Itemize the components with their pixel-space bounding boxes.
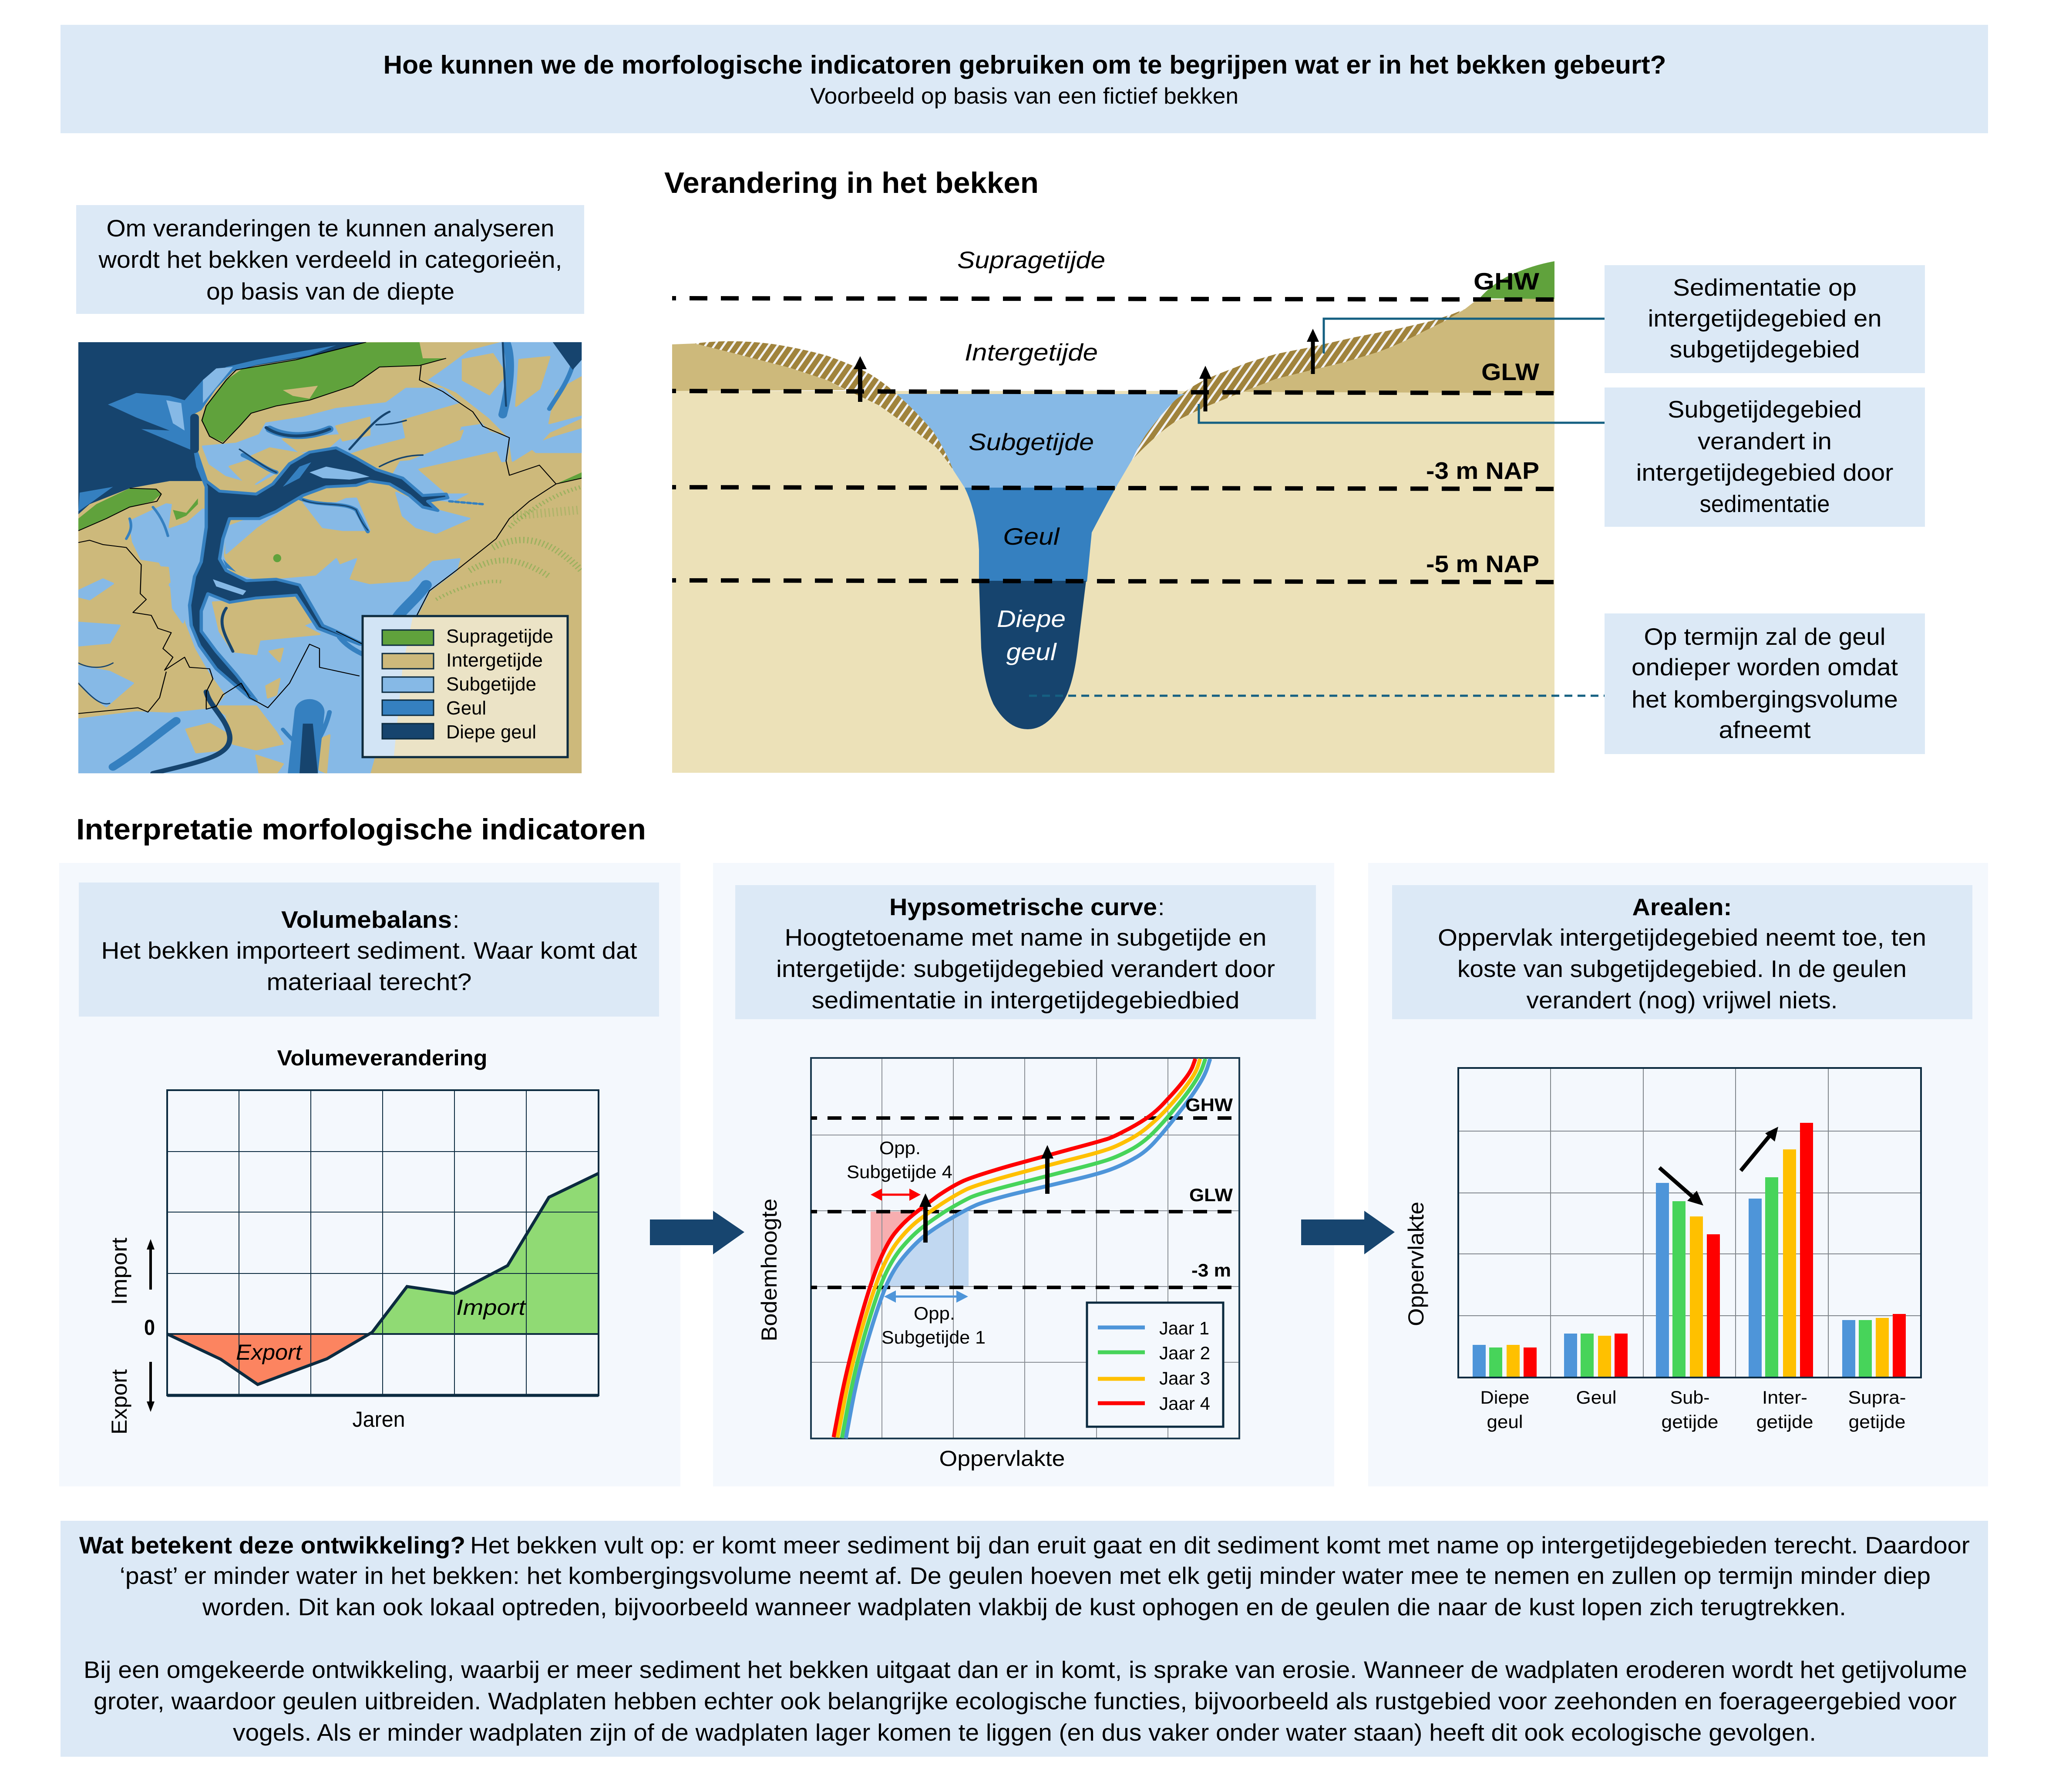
deep channels bbox=[190, 446, 448, 701]
blue double arrow bbox=[884, 1290, 968, 1303]
subtitle: Voorbeeld op basis van een fictief bekken bbox=[810, 84, 1238, 109]
arrow: panel 1 to 2 bbox=[650, 1211, 744, 1254]
panel header text: Oppervlak intergetijdegebied neemt toe, ten bbox=[1438, 924, 1926, 951]
callout: sedimentation bbox=[1605, 265, 1925, 373]
chart: hypsometric curves: Subgetijde 4 bbox=[847, 1162, 952, 1182]
arrow: panel 2 to 3 bbox=[1301, 1211, 1395, 1254]
legend: Jaar 4 bbox=[1159, 1393, 1210, 1414]
legend: Jaar 3 bbox=[1159, 1368, 1210, 1388]
callout: subtidal change bbox=[1605, 387, 1925, 527]
bars: subgetijde bbox=[1656, 1183, 1720, 1378]
tan right bank bbox=[1243, 298, 1554, 393]
cross-section diagram: Geul bbox=[1003, 523, 1060, 550]
chart: hypsometric curves: GLW bbox=[1189, 1185, 1233, 1205]
blue shaded area bbox=[885, 1212, 969, 1287]
cross-section diagram: GLW bbox=[1481, 358, 1539, 385]
chart: volume change: Export bbox=[236, 1340, 303, 1364]
callout: subtidal change: intergetijdegebied door bbox=[1636, 459, 1894, 486]
intro text box bbox=[76, 205, 584, 314]
tan islands inside subtidal areas bbox=[148, 354, 582, 773]
chart: hypsometric curves bbox=[757, 1058, 1239, 1471]
dashed levels bbox=[811, 1118, 1239, 1287]
map legend: Subgetijde bbox=[446, 674, 536, 695]
chart: volume change: Volumeverandering bbox=[277, 1046, 488, 1070]
callout: sedimentation: intergetijdegebied en bbox=[1648, 305, 1881, 332]
chart: volume change: 0 bbox=[144, 1315, 155, 1340]
cross-section diagram: geul bbox=[1006, 638, 1057, 665]
conclusion text box: groter, waardoor geulen uitbreiden. Wadplaten hebben echter ook belangrijke ecologische functies, bijvoorbeeld als rustgebied voor zeehonden en foerageergebied voor bbox=[94, 1688, 1957, 1715]
chart: hypsometric curves: Oppervlakte bbox=[939, 1446, 1065, 1471]
main title: Hoe kunnen we de morfologische indicatoren gebruiken om te begrijpen wat er in het bekken gebeurt? bbox=[383, 51, 1666, 79]
callout: channel becomes shallower: het kombergingsvolume bbox=[1632, 686, 1898, 713]
intro text box: wordt het bekken verdeeld in categorieën, bbox=[98, 246, 562, 273]
callout leader lines bbox=[1029, 319, 1605, 696]
map legend: Diepe geul bbox=[446, 721, 536, 743]
callout: subtidal change: Subgetijdegebied bbox=[1668, 396, 1862, 423]
chart: volume change: Jaren bbox=[353, 1407, 405, 1432]
green barrier islands bbox=[78, 342, 582, 562]
red double arrow bbox=[871, 1189, 921, 1201]
channel bbox=[965, 488, 1116, 582]
chart: areas per category: geul bbox=[1487, 1411, 1523, 1432]
subtidal water bbox=[897, 394, 1185, 488]
map of the basin bbox=[78, 342, 582, 773]
chart: areas per category: getijde bbox=[1848, 1411, 1906, 1432]
panel: volume balance bbox=[59, 863, 680, 1486]
surface labels: Opp. bbox=[879, 1138, 921, 1158]
cross-section diagram: Subgetijde bbox=[969, 428, 1094, 455]
chart: volume change: Export bbox=[107, 1369, 131, 1435]
mid-blue channel edges bbox=[113, 342, 573, 773]
chart: volume change: Import bbox=[456, 1295, 526, 1320]
panel header text: verandert (nog) vrijwel niets. bbox=[1526, 987, 1838, 1014]
panel header text: materiaal terecht? bbox=[266, 968, 472, 995]
callout: subtidal change: sedimentatie bbox=[1699, 490, 1830, 517]
trend arrows bbox=[1659, 1127, 1778, 1206]
category labels: Diepe bbox=[1480, 1387, 1530, 1408]
coast and border lines bbox=[78, 342, 582, 714]
light blue subtidal areas bbox=[78, 343, 582, 773]
legend bbox=[1087, 1303, 1223, 1427]
cross-section diagram: Diepe bbox=[997, 605, 1066, 632]
channel islands bbox=[213, 462, 370, 595]
chart: areas per category: Sub- bbox=[1670, 1387, 1710, 1408]
chart: areas per category: Inter- bbox=[1762, 1387, 1807, 1408]
legend: Jaar 2 bbox=[1159, 1343, 1210, 1363]
bars: intergetijde bbox=[1749, 1123, 1813, 1378]
level labels: GHW bbox=[1474, 268, 1539, 295]
cross-section diagram bbox=[672, 246, 1605, 773]
chart: areas per category: getijde bbox=[1756, 1411, 1813, 1432]
map legend: Geul bbox=[446, 697, 486, 719]
panel header text: intergetijde: subgetijdegebied verandert door bbox=[776, 955, 1275, 982]
panel header text: Hoogtetoename met name in subgetijde en bbox=[784, 924, 1267, 951]
conclusion text box: ‘past’ er minder water in het bekken: het kombergingsvolume neemt af. De geulen hoeven met elk getij minder water mee te nemen en zullen op termijn minder diep bbox=[120, 1562, 1931, 1589]
panel header text: koste van subgetijdegebied. In de geulen bbox=[1457, 955, 1907, 982]
thin deep branches bbox=[78, 343, 506, 773]
callout: channel becomes shallower bbox=[1605, 613, 1925, 754]
conclusion text box: Bij een omgekeerde ontwikkeling, waarbij er meer sediment het bekken uitgaat dan er in komt, is sprake van erosie. Wanneer de wadplaten eroderen wordt het getijvolume bbox=[84, 1656, 1967, 1683]
intro text box: op basis van de diepte bbox=[206, 278, 454, 305]
title banner bbox=[61, 25, 1988, 133]
chart: areas per category: Supra- bbox=[1848, 1387, 1906, 1408]
bars: geul bbox=[1564, 1334, 1628, 1378]
panel header text bbox=[79, 883, 659, 1017]
chart: volume change bbox=[107, 1046, 599, 1435]
panel header text: : bbox=[453, 906, 459, 933]
conclusion text box: Wat betekent deze ontwikkeling? bbox=[79, 1532, 465, 1559]
sedimentation arrows bbox=[854, 329, 1319, 411]
map legend: Supragetijde bbox=[446, 626, 553, 647]
black rise arrows bbox=[919, 1145, 1053, 1243]
map legend bbox=[363, 616, 568, 757]
chart: areas per category: getijde bbox=[1661, 1411, 1719, 1432]
panel header text bbox=[735, 885, 1316, 1019]
cross-section diagram: -5 m NAP bbox=[1426, 550, 1539, 577]
panel header text: Volumebalans bbox=[281, 906, 452, 933]
legend: Jaar 1 bbox=[1159, 1318, 1209, 1338]
bars: diepe geul bbox=[1473, 1345, 1537, 1378]
panel header text: sedimentatie in intergetijdegebiedbied bbox=[811, 987, 1240, 1014]
callout: channel becomes shallower: ondieper worden omdat bbox=[1632, 653, 1898, 680]
heading: change in the basin: Verandering in het bekken bbox=[664, 166, 1039, 199]
chart: volume change: Import bbox=[107, 1237, 131, 1305]
panel header text: Hypsometrische curve bbox=[889, 893, 1157, 920]
lower-right land green specks bbox=[436, 487, 582, 600]
chart: areas per category: Geul bbox=[1576, 1387, 1617, 1408]
deep sea bbox=[78, 342, 366, 514]
heading: interpretation: Interpretatie morfologische indicatoren bbox=[76, 813, 646, 846]
chart: hypsometric curves: -3 m bbox=[1191, 1260, 1231, 1280]
callout: subtidal change: verandert in bbox=[1698, 428, 1832, 455]
panel header text: Het bekken importeert sediment. Waar komt dat bbox=[101, 937, 637, 964]
cross-section diagram: -3 m NAP bbox=[1426, 457, 1539, 484]
bars: supragetijde bbox=[1842, 1314, 1906, 1378]
chart: hypsometric curves: Opp. bbox=[914, 1303, 955, 1324]
zone labels: Supragetijde bbox=[957, 246, 1105, 273]
conclusion text box: Het bekken vult op: er komt meer sediment bij dan eruit gaat en dit sediment komt met name op intergetijdegebieden terecht. Daardoor bbox=[470, 1532, 1970, 1559]
volume line bbox=[167, 1173, 599, 1384]
chart: hypsometric curves: Bodemhoogte bbox=[757, 1199, 781, 1341]
map legend: Intergetijde bbox=[446, 650, 543, 671]
cross-section diagram: Intergetijde bbox=[965, 339, 1098, 366]
sand body bbox=[672, 391, 1554, 773]
chart: areas per category: Oppervlakte bbox=[1404, 1202, 1428, 1326]
conclusion text box: vogels. Als er minder wadplaten zijn of de wadplaten lager komen te liggen (en dus vaker onder water staan) heeft dit ook ecologische gevolgen. bbox=[233, 1719, 1816, 1746]
green high ground bbox=[1480, 261, 1554, 299]
import/export arrows bbox=[147, 1239, 155, 1412]
callout: channel becomes shallower: afneemt bbox=[1719, 716, 1811, 743]
chart: areas per category bbox=[1404, 1068, 1921, 1432]
panel header text bbox=[1392, 885, 1972, 1019]
deep channel bbox=[979, 581, 1086, 729]
panel header text: : bbox=[1158, 893, 1164, 920]
chart: hypsometric curves: Subgetijde 1 bbox=[881, 1327, 986, 1347]
level labels: GHW bbox=[1185, 1095, 1233, 1115]
conclusion text box bbox=[61, 1521, 1988, 1757]
sediment hatch right bbox=[1132, 309, 1465, 460]
tan left bank bbox=[672, 344, 846, 391]
dashed level lines bbox=[672, 298, 1554, 582]
callout: sedimentation: Sedimentatie op bbox=[1673, 274, 1857, 301]
callout: sedimentation: subgetijdegebied bbox=[1670, 336, 1860, 363]
red shaded area bbox=[869, 1212, 914, 1287]
shallow foreshore shading bbox=[78, 345, 336, 512]
conclusion text box: worden. Dit kan ook lokaal optreden, bijvoorbeeld wanneer wadplaten vlakbij de kust ophogen en de geulen die naar de kust lopen zich terugtrekken. bbox=[202, 1593, 1846, 1620]
callout: channel becomes shallower: Op termijn zal de geul bbox=[1644, 623, 1886, 650]
intro text box: Om veranderingen te kunnen analyseren bbox=[106, 215, 555, 242]
import area bbox=[372, 1173, 599, 1334]
export area bbox=[167, 1334, 372, 1384]
year curves bbox=[834, 1059, 1210, 1438]
panel: hypsometric curve bbox=[713, 863, 1334, 1486]
sediment hatch left bbox=[695, 341, 953, 470]
panel: areas bbox=[1368, 863, 1988, 1486]
panel header text: Arealen: bbox=[1632, 893, 1732, 920]
